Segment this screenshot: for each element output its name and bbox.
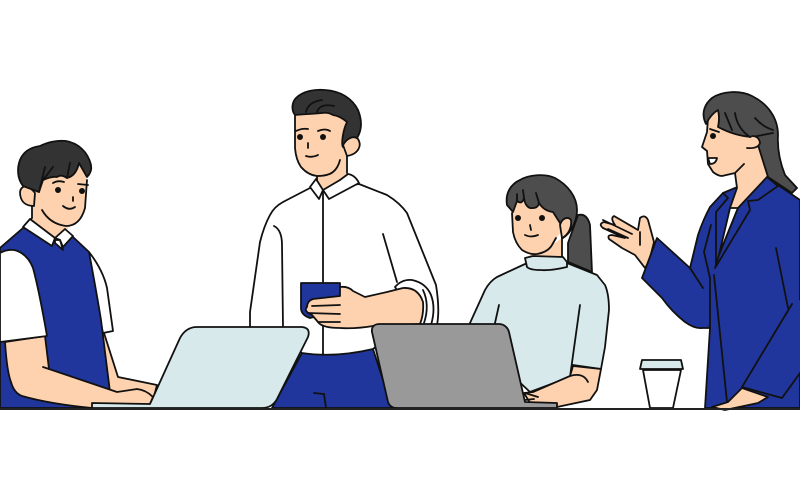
laptop: grey laptop xyxy=(372,324,557,408)
person: man in blue vest at left xyxy=(0,141,157,408)
laptop: light blue laptop xyxy=(92,327,309,408)
person: seated woman in light blue sweater xyxy=(470,175,609,407)
coffee cup xyxy=(640,360,683,408)
person: standing woman in blue blazer xyxy=(601,92,800,410)
person: standing man in white shirt with cup xyxy=(250,90,438,408)
table edge line xyxy=(0,408,800,410)
